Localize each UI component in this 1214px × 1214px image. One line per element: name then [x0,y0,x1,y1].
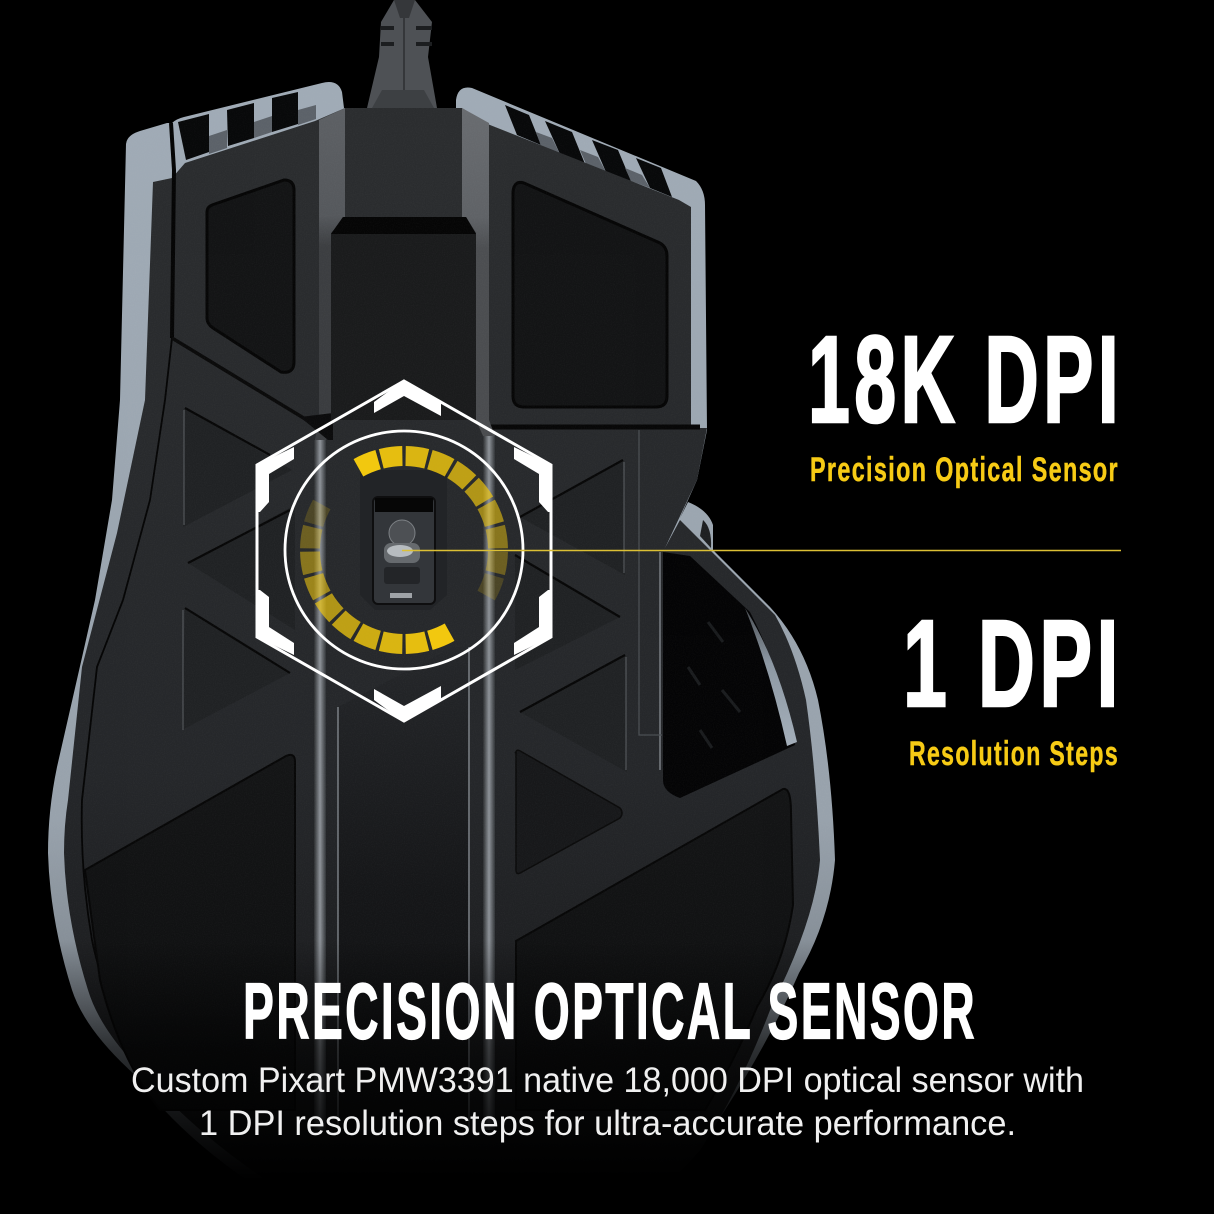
description text: Custom Pixart PMW3391 native 18,000 DPI optical sensor with [131,1061,1084,1100]
left button seam [171,123,174,338]
sensor circle [285,431,523,669]
triangle dark edges [185,408,625,813]
sensor lens [389,520,415,546]
lower right triangle pad [516,750,622,874]
left highlight strip [300,108,345,1130]
triangle light edges [183,410,626,770]
lower right pad [516,789,793,1110]
centre top pad [331,217,476,420]
grey lower vent bands [209,105,650,188]
callout line [402,550,1121,552]
sensor window [373,497,435,604]
fade to black at bottom [0,940,1214,1180]
DPI ring segments [299,445,509,655]
side bump detail [700,520,711,548]
left inner seam [82,338,172,1030]
right wheel pad [513,182,667,407]
outer shell silhouette [48,82,835,1214]
right highlight strip [462,108,495,1130]
stat label: Resolution Steps: Resolution Steps [909,735,1119,773]
description text [131,1061,1084,1143]
mouse underside photo [48,0,835,1152]
body seams [172,338,320,428]
thumb button window [639,430,797,798]
side recess triangles [182,408,627,772]
main dark body [64,108,820,1214]
cable and strain relief [367,0,437,108]
centre panel lines [338,647,469,1130]
hexagon corner brackets [374,380,441,416]
hexagon frame [257,380,551,722]
lower centre panel [338,647,468,1140]
left wheel pad [207,180,294,372]
sensor recess [360,470,447,610]
lower left pad [85,755,295,1110]
description text: 1 DPI resolution steps for ultra-accurate performance. [199,1104,1016,1143]
top vents [178,92,672,197]
